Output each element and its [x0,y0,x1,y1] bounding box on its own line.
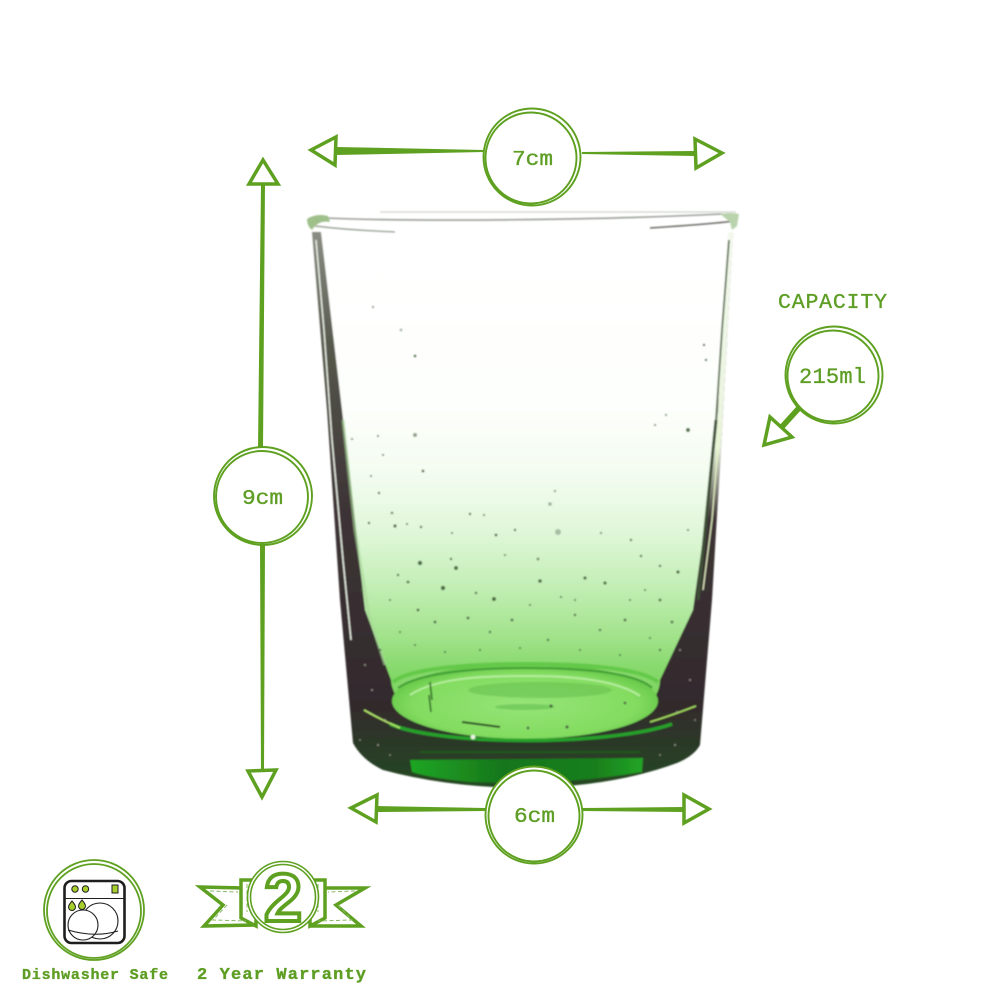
circle [786,326,882,424]
glass wall and base [312,232,733,788]
dishwasher label: Dishwasher Safe [22,967,168,984]
lens base of glass [392,663,658,739]
left arrow [351,795,486,822]
dishwasher safe badge [22,860,168,984]
inner glass body [321,232,728,738]
right arrow [582,139,722,168]
icon: dishwasher [64,881,124,943]
label: 6cm [514,806,555,829]
right wall highlights [716,240,729,420]
green band in base [410,758,643,783]
seal numeral: 2 [264,860,302,936]
circle [486,766,582,864]
pointer arrow [764,406,801,445]
warranty label: 2 Year Warranty [197,966,366,985]
left arrow [311,137,484,165]
ribbon [200,880,365,926]
top arrow [249,160,278,448]
capacity value: 215ml [799,365,866,390]
seal ring [248,862,318,932]
right arrow [582,795,709,823]
9cm height dimension [214,160,312,797]
label: 9cm [242,488,283,511]
capacity callout [764,291,887,445]
left wall highlights [316,240,351,640]
circle [214,447,312,545]
two year warranty badge [197,860,366,985]
rim [380,211,736,213]
glass tumbler photo [307,212,739,788]
circle [484,108,580,206]
6cm base dimension [351,766,709,864]
upper right wall highlight [707,232,733,520]
sparkles in dark wall [359,649,696,756]
bottom arrow [248,545,276,797]
capacity heading: CAPACITY [778,291,887,315]
label: 7cm [512,149,553,172]
7cm width dimension [311,108,722,206]
lower rim line of lens [390,724,672,740]
bubbles in glass [351,306,707,739]
badge ring [44,860,144,960]
